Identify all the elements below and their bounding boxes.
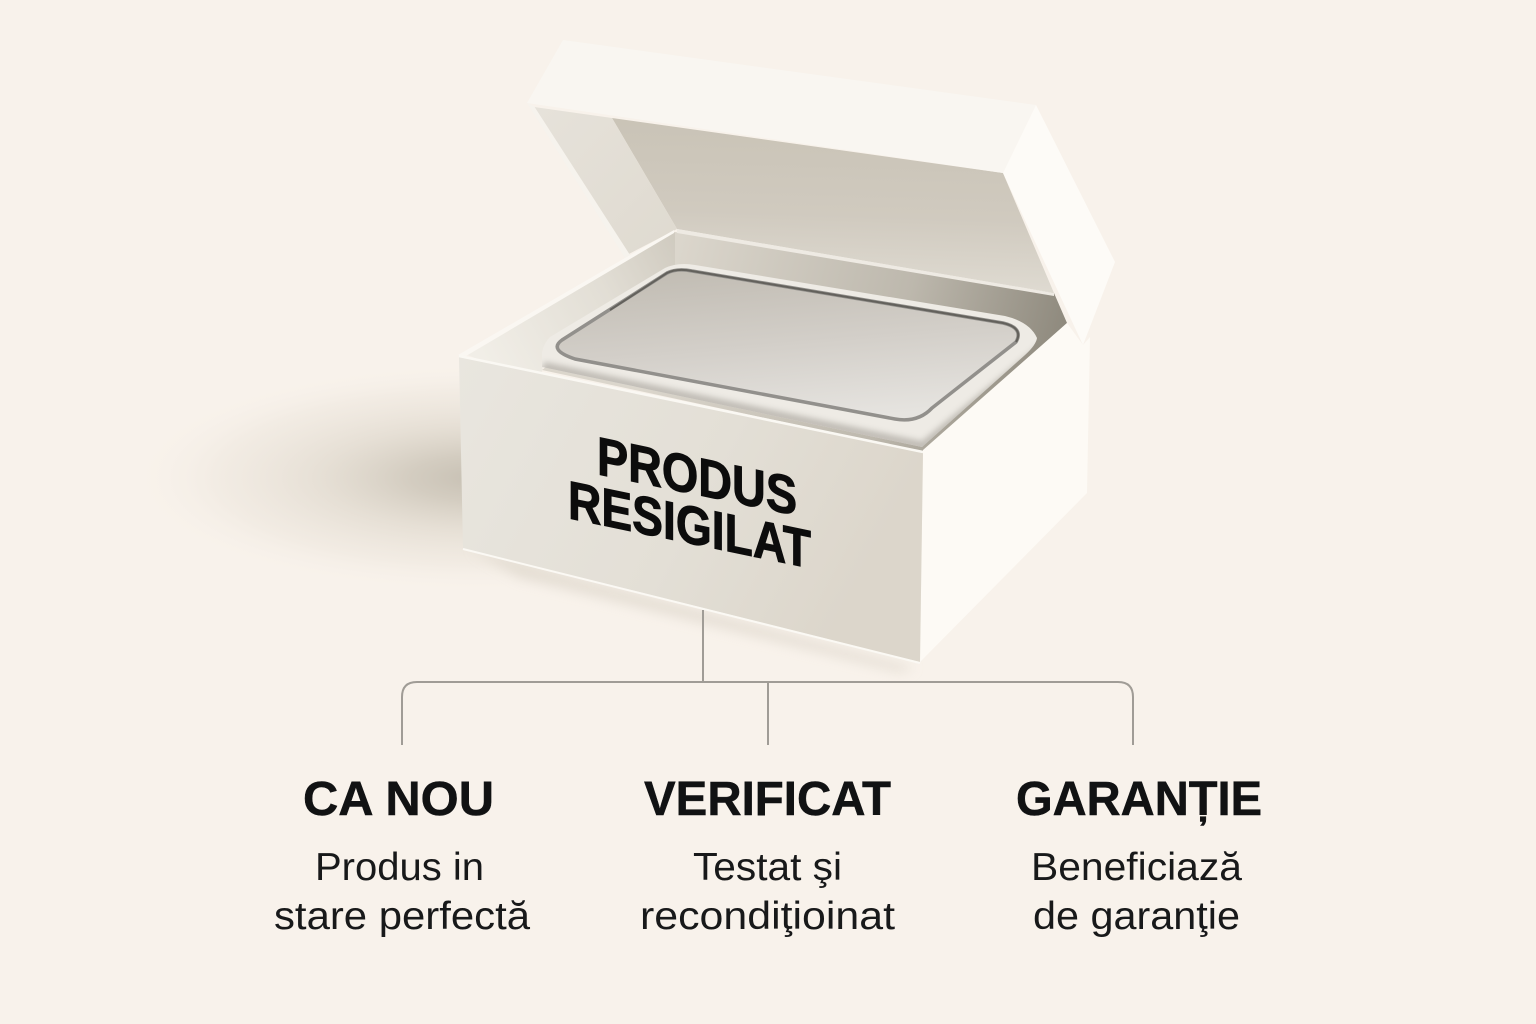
illustration: open box xyxy=(459,106,1115,664)
box left rim xyxy=(458,230,674,356)
description: stare perfectă xyxy=(274,895,530,938)
description: recondiţioinat xyxy=(640,895,895,938)
product lower shading xyxy=(540,344,1040,452)
column: ca nou xyxy=(274,773,530,938)
product screen top edge xyxy=(610,270,1018,342)
box label xyxy=(568,420,811,580)
description xyxy=(274,846,530,938)
front bottom highlight xyxy=(463,549,920,663)
column: verificat xyxy=(640,773,895,938)
front top highlight xyxy=(459,356,923,452)
box shadow xyxy=(130,362,915,672)
lid top face xyxy=(527,40,1036,173)
description: Produs in xyxy=(315,846,484,889)
product xyxy=(540,264,1040,452)
lid interior back xyxy=(612,118,1054,293)
heading: VERIFICAT xyxy=(644,773,891,826)
heading: GARANȚIE xyxy=(1016,773,1262,826)
description xyxy=(640,846,895,938)
box inner back wall xyxy=(542,232,1067,452)
lid interior left xyxy=(534,107,677,256)
box inner left wall xyxy=(465,232,675,372)
product body xyxy=(542,264,1037,447)
description xyxy=(1031,846,1242,938)
description: Beneficiază xyxy=(1031,846,1242,889)
box front face xyxy=(459,357,923,662)
product screen xyxy=(557,270,1018,420)
lid right side xyxy=(1003,105,1115,345)
box label: RESIGILAT xyxy=(568,470,811,580)
description: de garanţie xyxy=(1033,895,1240,938)
column: garantie xyxy=(1016,773,1262,938)
lid hinge highlight xyxy=(677,229,1054,296)
heading: CA NOU xyxy=(303,773,494,826)
description: Testat şi xyxy=(693,846,842,889)
box label: PRODUS xyxy=(597,426,797,527)
lid left edge xyxy=(527,103,630,258)
box right side xyxy=(920,323,1090,662)
connector lines xyxy=(402,610,1133,745)
